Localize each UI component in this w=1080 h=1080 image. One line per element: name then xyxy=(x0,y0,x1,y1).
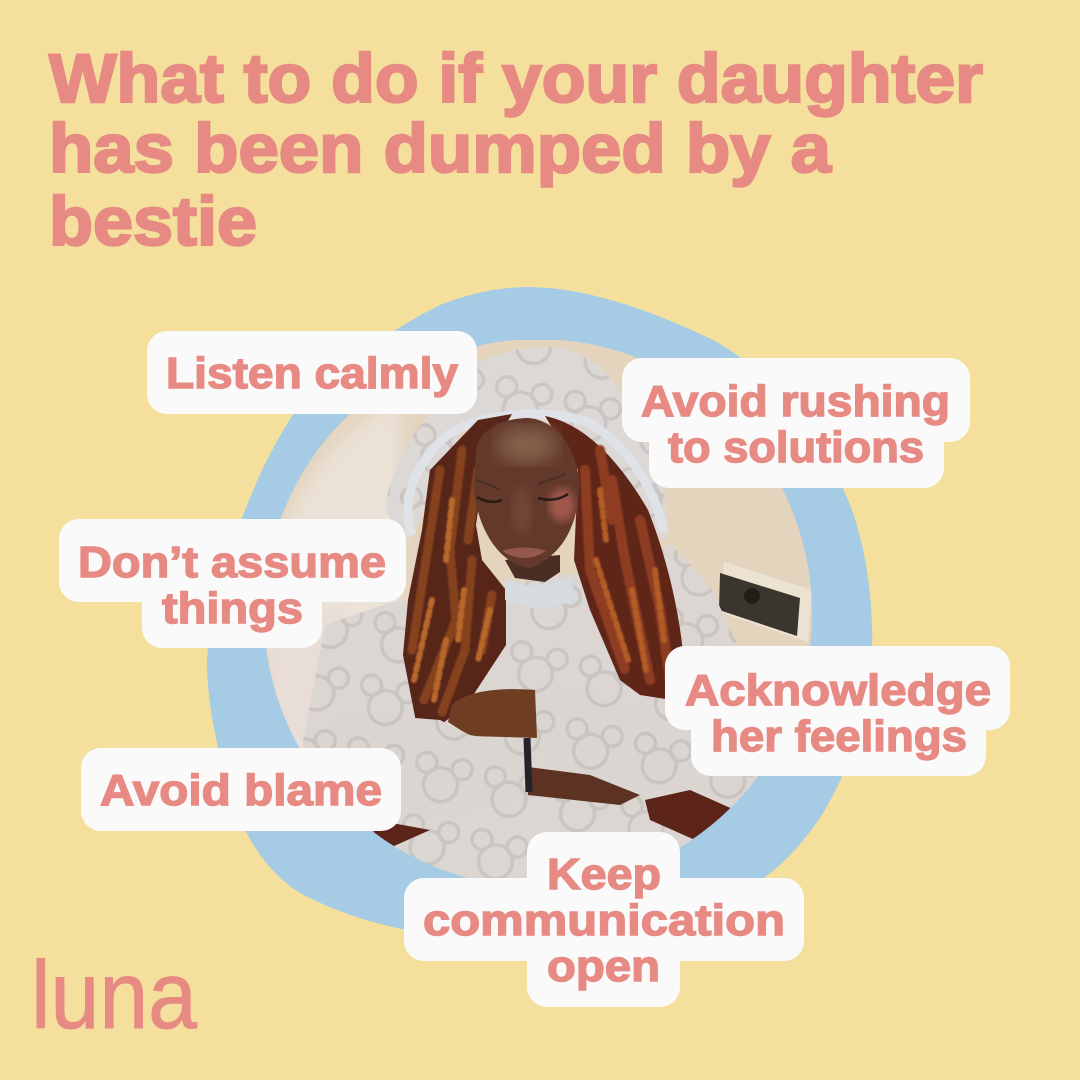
closed eyes xyxy=(477,494,568,502)
upper forearm xyxy=(448,689,537,738)
hoodie body xyxy=(303,543,762,890)
pill: Avoid blame xyxy=(81,748,401,831)
pill: Don't assume things xyxy=(59,519,406,648)
hoodie collar xyxy=(505,578,578,610)
pill: Acknowledge her feelings xyxy=(665,646,1010,776)
pill: Avoid rushing to solutions: to solutions xyxy=(668,423,924,472)
face xyxy=(474,418,579,568)
neck xyxy=(505,555,560,582)
bottom hair xyxy=(365,790,735,850)
photo: girl in hoodie xyxy=(260,340,820,890)
eyebrows xyxy=(476,474,566,490)
right braids xyxy=(545,416,685,700)
left sleeve xyxy=(415,718,478,736)
pill: Acknowledge her feelings: her feelings xyxy=(711,712,967,761)
pill: Keep communication open xyxy=(404,832,804,1007)
title: bestie xyxy=(49,183,257,260)
pill: Avoid rushing to solutions: Avoid rushing xyxy=(641,377,950,426)
hood xyxy=(386,347,667,545)
pill: Avoid blame: Avoid blame xyxy=(100,766,382,815)
wall and chair xyxy=(260,340,820,890)
title: What to do if your daughter xyxy=(49,40,983,117)
lips xyxy=(502,548,546,558)
title xyxy=(49,40,983,260)
right sleeve xyxy=(535,686,762,798)
pill: Listen calmly xyxy=(147,331,477,414)
title: has been dumped by a xyxy=(49,110,832,187)
bracelet xyxy=(527,738,529,792)
pill: Keep communication open: open xyxy=(547,942,660,991)
left braids xyxy=(403,414,512,726)
pill: Keep communication open: communication xyxy=(423,896,785,945)
wall socket xyxy=(719,562,812,642)
pill: Don't assume things: things xyxy=(162,584,303,633)
lower forearm xyxy=(528,767,640,805)
pill: Don't assume things: Don’t assume xyxy=(78,538,386,587)
pill: Keep communication open: Keep xyxy=(547,850,661,899)
blue blob xyxy=(207,287,872,937)
logo: luna xyxy=(31,942,198,1049)
pill: Listen calmly: Listen calmly xyxy=(166,349,459,398)
pill: Avoid rushing to solutions xyxy=(622,358,970,488)
pill: Acknowledge her feelings: Acknowledge xyxy=(685,666,991,715)
